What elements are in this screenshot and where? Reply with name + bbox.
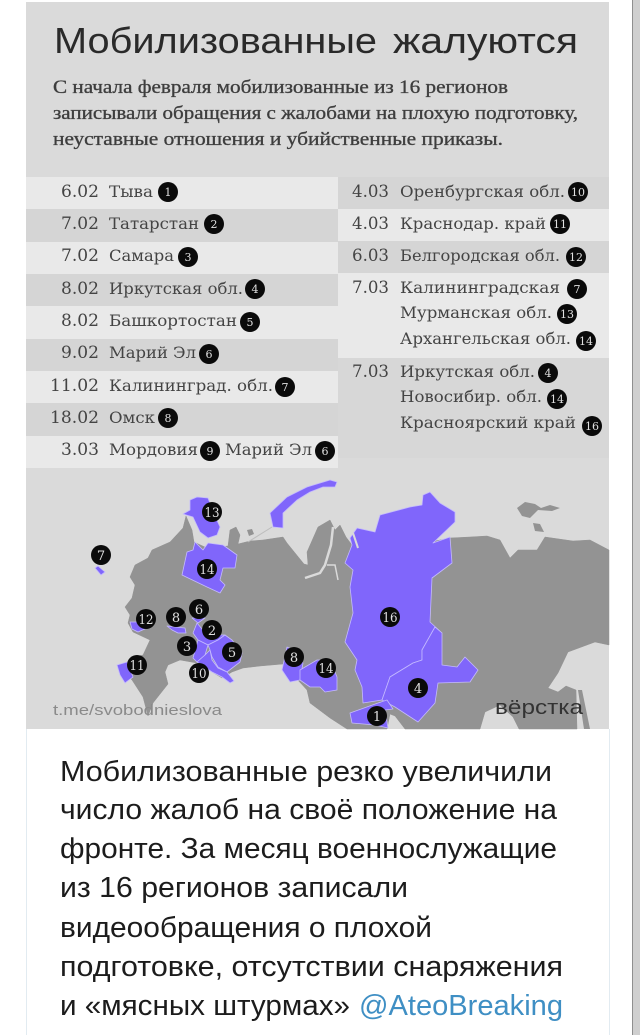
row: 4.03 Краснодар. край: 4.03 bbox=[352, 214, 389, 234]
panel: infographic background bbox=[26, 2, 609, 729]
region: Samara bbox=[193, 640, 208, 662]
map number badges: 12 bbox=[138, 613, 154, 628]
region: Krasnoyarsk bbox=[345, 492, 455, 703]
row: 8.02 Башкортостан: 5 bbox=[246, 316, 254, 329]
row: 9.02 Марий Эл bbox=[61, 343, 219, 364]
intro text block: С начала февраля мобилизованные из 16 регионов bbox=[53, 78, 508, 98]
intro text block bbox=[53, 78, 578, 150]
row: 8.02 Иркутская обл.: Иркутская обл. bbox=[109, 279, 243, 298]
row: 3.03 Мордовия, Марий Эл: 6 bbox=[322, 445, 328, 458]
row: 7.03 Калининградская, Мурманская, Архангельская: 14 bbox=[579, 335, 593, 348]
map number badges: 16 bbox=[382, 611, 398, 626]
row: 3.03 Мордовия, Марий Эл: 3.03 bbox=[61, 440, 99, 460]
row: 8.02 Башкортостан: 8.02 bbox=[61, 311, 99, 331]
row: 7.02 Самара: 7.02 bbox=[61, 246, 99, 266]
logo: Вёрстка: вёрстка bbox=[495, 697, 584, 719]
row: 7.03 Иркутская, Новосибир., Красноярский: 16 bbox=[585, 420, 599, 433]
region: Tyva bbox=[350, 700, 393, 728]
row: 11.02 Калининград. обл.: 11.02 bbox=[50, 376, 99, 396]
map of Russia bbox=[91, 480, 609, 729]
row: 9.02 Марий Эл: 9.02 bbox=[61, 343, 99, 363]
row: 3.03 Мордовия, Марий Эл: Мордовия bbox=[109, 440, 198, 459]
row: 7.03 Иркутская, Новосибир., Красноярский: 4 bbox=[544, 367, 552, 380]
caption text block: подготовке, отсутствии снаряжения bbox=[60, 951, 563, 983]
region: Krasnodar bbox=[117, 662, 133, 683]
row: 7.02 Татарстан bbox=[61, 214, 224, 234]
row: 3.03 Мордовия, Марий Эл: Марий Эл bbox=[225, 440, 312, 459]
row: 6.03 Белгородская обл.: 12 bbox=[569, 251, 583, 264]
title: Мобилизованные bbox=[54, 20, 377, 61]
title bbox=[54, 20, 578, 61]
map number badges: 8 bbox=[290, 651, 298, 666]
map number badges: 3 bbox=[183, 640, 191, 655]
row: 11.02 Калининград. обл.: Калининград. обл. bbox=[109, 376, 273, 395]
row: 7.02 Татарстан: 7.02 bbox=[61, 214, 99, 234]
region: Tatarstan bbox=[193, 623, 225, 645]
panel: left date list bbox=[26, 177, 338, 468]
row: 7.03 Калининградская, Мурманская, Архангельская: 13 bbox=[560, 308, 574, 321]
row: 7.02 Татарстан: Татарстан bbox=[109, 214, 199, 233]
row: 7.03 Калининградская, Мурманская, Архангельская: Калининградская bbox=[400, 278, 560, 297]
row: 8.02 Иркутская обл. bbox=[61, 279, 265, 299]
row: 11.02 Калининград. обл.: 7 bbox=[282, 381, 288, 394]
map number badges: 2 bbox=[208, 624, 216, 639]
map number badges: 8 bbox=[172, 611, 180, 626]
map number badges: 1 bbox=[373, 710, 381, 725]
map number badges: 11 bbox=[130, 659, 144, 674]
row: 7.02 Татарстан: 2 bbox=[210, 218, 218, 231]
region: Kaliningrad bbox=[95, 566, 105, 575]
row: 6.03 Белгородская обл. bbox=[352, 246, 586, 267]
region: Irkutsk bbox=[382, 627, 478, 722]
caption text block: число жалоб на своё положение на bbox=[60, 794, 557, 826]
row: 4.03 Краснодар. край: 11 bbox=[553, 218, 567, 231]
row: 7.03 Иркутская, Новосибир., Красноярский: 7.03 bbox=[352, 362, 389, 382]
row: 18.02 Омск: Омск bbox=[109, 408, 155, 427]
credit: telegram channel: t.me/svobodnieslova bbox=[53, 702, 223, 719]
row: 9.02 Марий Эл: Марий Эл bbox=[109, 343, 196, 362]
caption text block: из 16 регионов записали bbox=[60, 872, 408, 904]
row: 11.02 Калининград. обл. bbox=[50, 376, 295, 397]
caption text block: фронте. За месяц военнослужащие bbox=[60, 833, 557, 865]
row: 7.03 Калининградская, Мурманская, Архангельская: Архангельская обл. bbox=[400, 329, 571, 348]
link: @AteoBreaking: @AteoBreaking bbox=[359, 990, 563, 1022]
row: 7.03 Калининградская, Мурманская, Архангельская: 7.03 bbox=[352, 278, 389, 298]
row: 7.03 Калининградская, Мурманская, Архангельская: Мурманская обл. bbox=[400, 303, 552, 322]
map number badges: 10 bbox=[192, 667, 206, 682]
row: 7.02 Самара: 3 bbox=[184, 251, 192, 264]
region: Bashkortostan bbox=[208, 635, 242, 672]
row: 3.03 Мордовия, Марий Эл bbox=[61, 440, 335, 461]
row: 6.03 Белгородская обл.: Белгородская обл. bbox=[400, 246, 560, 265]
row: 4.03 Оренбургская обл.: 10 bbox=[571, 186, 585, 199]
caption text block bbox=[60, 756, 563, 1022]
row: 9.02 Марий Эл: 6 bbox=[206, 348, 212, 361]
region: Orenburg bbox=[197, 650, 234, 683]
intro text block: неуставные отношения и убийственные приказы. bbox=[53, 130, 503, 150]
region: Omsk bbox=[282, 647, 303, 682]
map number badges bbox=[91, 502, 428, 726]
row: 6.02 Тыва: 6.02 bbox=[61, 182, 99, 202]
region: Mordovia bbox=[167, 626, 186, 633]
row: 18.02 Омск bbox=[50, 408, 178, 428]
row: 6.03 Белгородская обл.: 6.03 bbox=[352, 246, 389, 266]
row: 7.03 Калининградская, Мурманская, Архангельская bbox=[352, 278, 596, 351]
row: 7.03 Иркутская, Новосибир., Красноярский: Красноярский край bbox=[400, 413, 576, 432]
map number badges: 13 bbox=[204, 506, 220, 521]
map number badges: 14 bbox=[200, 563, 214, 578]
row: 18.02 Омск: 18.02 bbox=[50, 408, 99, 428]
row: 6.02 Тыва: Тыва bbox=[109, 182, 153, 201]
row: 7.03 Иркутская, Новосибир., Красноярский: Новосибир. обл. bbox=[400, 387, 542, 406]
row: 7.03 Калининградская, Мурманская, Архангельская: 7 bbox=[574, 283, 580, 296]
row: 6.02 Тыва: 1 bbox=[164, 186, 172, 199]
row: 7.03 Иркутская, Новосибир., Красноярский: Иркутская обл. bbox=[400, 362, 535, 381]
region: Murmansk bbox=[183, 497, 220, 538]
row: 3.03 Мордовия, Марий Эл: 9 bbox=[206, 445, 214, 458]
map number badges: 7 bbox=[97, 549, 105, 564]
intro text block: записывали обращения с жалобами на плохую подготовку, bbox=[53, 104, 578, 124]
row: 4.03 Краснодар. край: Краснодар. край bbox=[400, 214, 546, 233]
title: жалуются bbox=[393, 20, 578, 61]
row: 4.03 Краснодар. край bbox=[352, 214, 570, 234]
map number badges: 5 bbox=[228, 646, 236, 661]
panel: right date list bbox=[338, 177, 609, 458]
caption text block: и «мясных штурмах» bbox=[60, 990, 350, 1022]
row: 8.02 Башкортостан: Башкортостан bbox=[109, 311, 237, 330]
region: Mari El bbox=[192, 618, 205, 623]
caption text block: Мобилизованные резко увеличили bbox=[60, 756, 552, 788]
row: 7.02 Самара: Самара bbox=[109, 246, 174, 265]
row: 8.02 Башкортостан bbox=[61, 311, 260, 332]
map number badges: 4 bbox=[414, 682, 422, 697]
row: 4.03 Оренбургская обл.: 4.03 bbox=[352, 182, 389, 202]
region: Arkhangelsk bbox=[182, 542, 237, 593]
map number badges: 6 bbox=[195, 603, 203, 618]
caption text block: видеообращения о плохой bbox=[60, 912, 432, 944]
row: 4.03 Оренбургская обл. bbox=[352, 182, 588, 202]
region: Novosibirsk bbox=[300, 660, 337, 692]
landmass bbox=[122, 516, 609, 729]
region: Novaya Zemlya bbox=[270, 480, 337, 528]
row: 8.02 Иркутская обл.: 4 bbox=[252, 283, 258, 296]
row: 6.02 Тыва bbox=[61, 182, 178, 202]
row: 7.03 Иркутская, Новосибир., Красноярский bbox=[352, 362, 602, 436]
row: 4.03 Оренбургская обл.: Оренбургская обл. bbox=[400, 182, 565, 201]
region: Belgorod bbox=[130, 622, 147, 632]
map number badges: 14 bbox=[318, 662, 334, 677]
row: 8.02 Иркутская обл.: 8.02 bbox=[61, 279, 99, 299]
row: 7.02 Самара bbox=[61, 246, 198, 267]
row: 18.02 Омск: 8 bbox=[164, 412, 172, 425]
row: 7.03 Иркутская, Новосибир., Красноярский: 14 bbox=[550, 393, 564, 406]
